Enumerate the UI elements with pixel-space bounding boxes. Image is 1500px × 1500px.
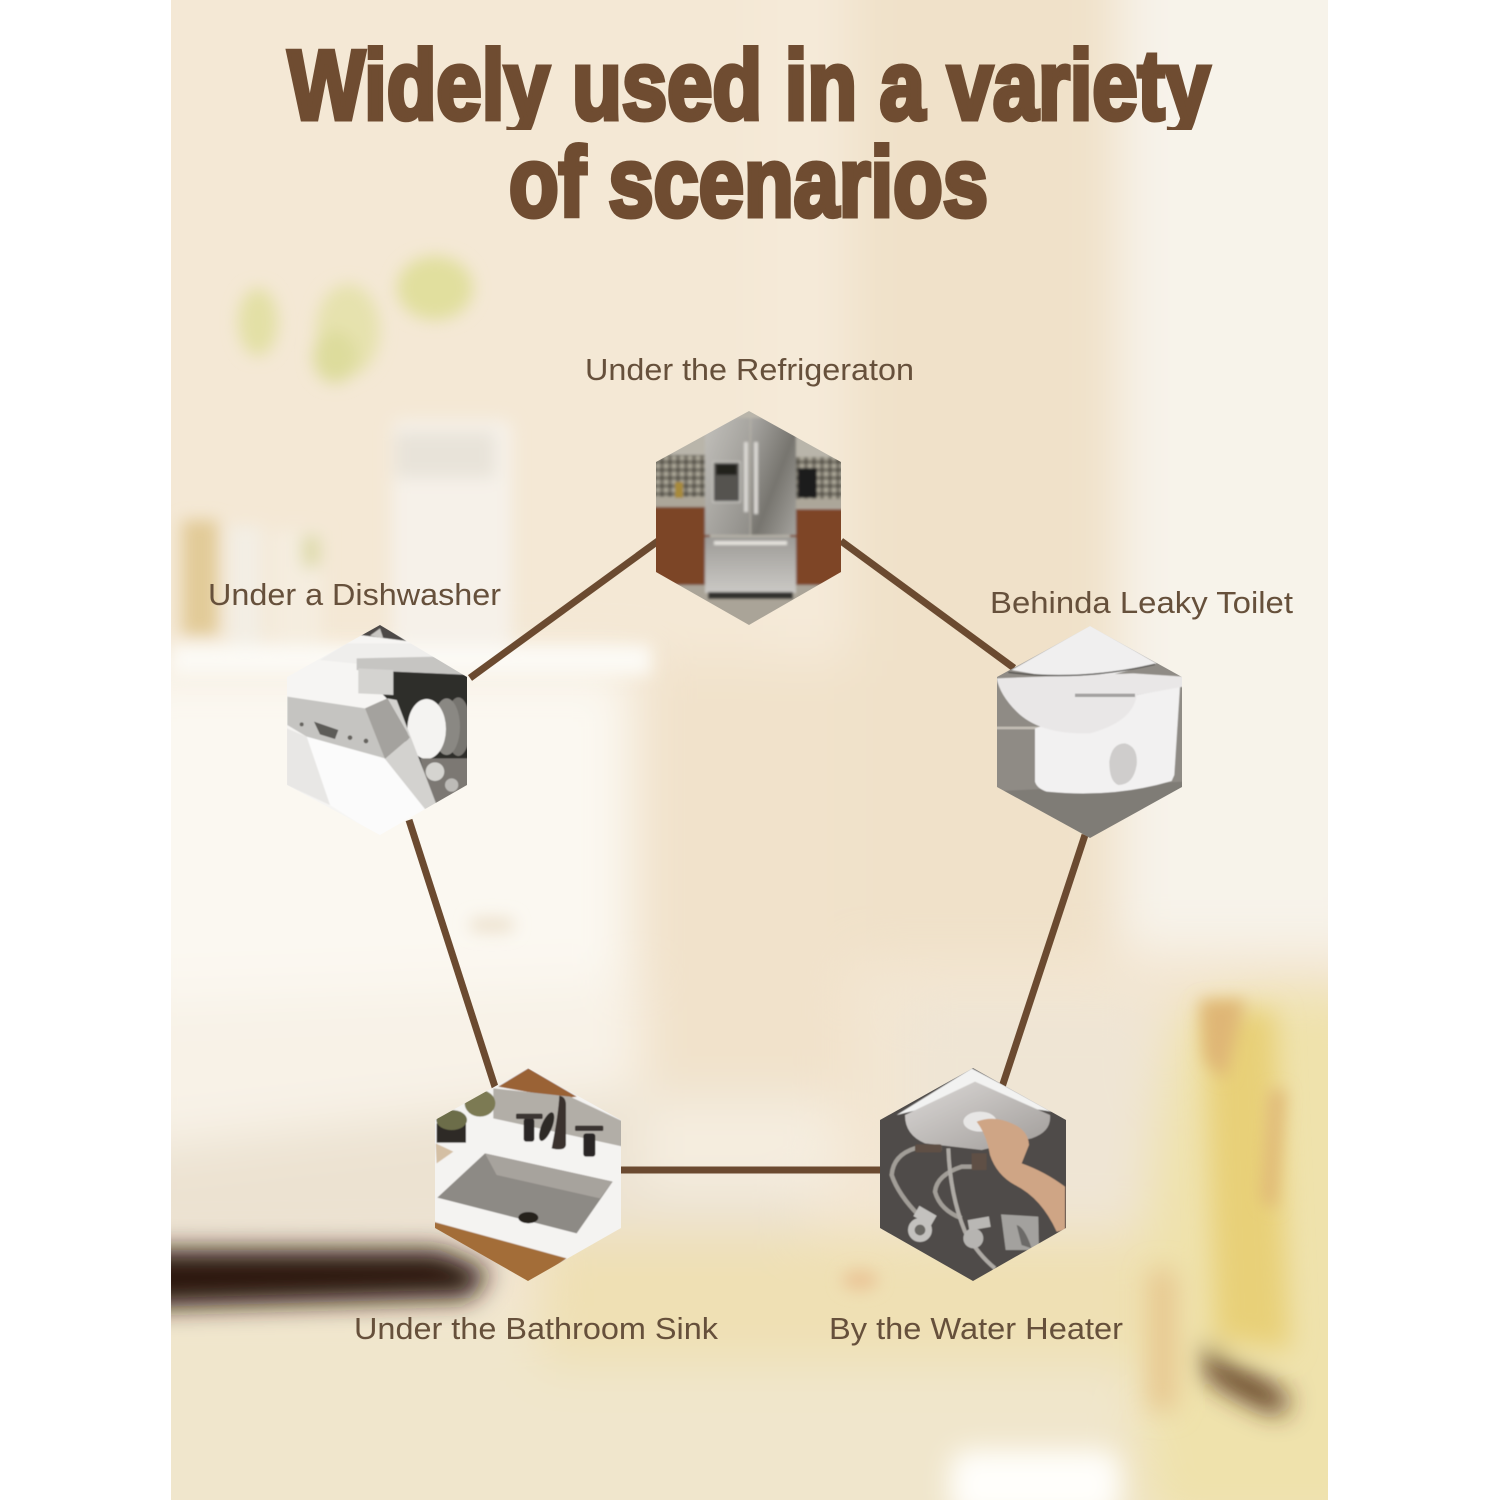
decorative blurred room objects: [120, 1010, 1290, 1500]
label: by the water heater: By the Water Heater: [829, 1311, 1123, 1346]
icon: water heater hexagon: [875, 1065, 1075, 1285]
label: under the refrigerator: Under the Refrigeraton: [585, 352, 914, 387]
icon: bathroom sink hexagon: [430, 1065, 630, 1285]
icon: refrigerator hexagon: [656, 411, 841, 625]
icon: toilet hexagon: [997, 626, 1182, 838]
icon: dishwasher hexagon: [287, 625, 467, 834]
title: [285, 45, 1212, 220]
label: under the bathroom sink: Under the Bathroom Sink: [354, 1311, 719, 1346]
label: under a dishwasher: Under a Dishwasher: [208, 577, 501, 612]
label: behind a leaky toilet: Behinda Leaky Toilet: [990, 585, 1293, 620]
title: Widely used in a variety: [288, 30, 1210, 140]
connector lines: [409, 541, 1085, 1170]
title: of scenarios: [509, 127, 988, 237]
